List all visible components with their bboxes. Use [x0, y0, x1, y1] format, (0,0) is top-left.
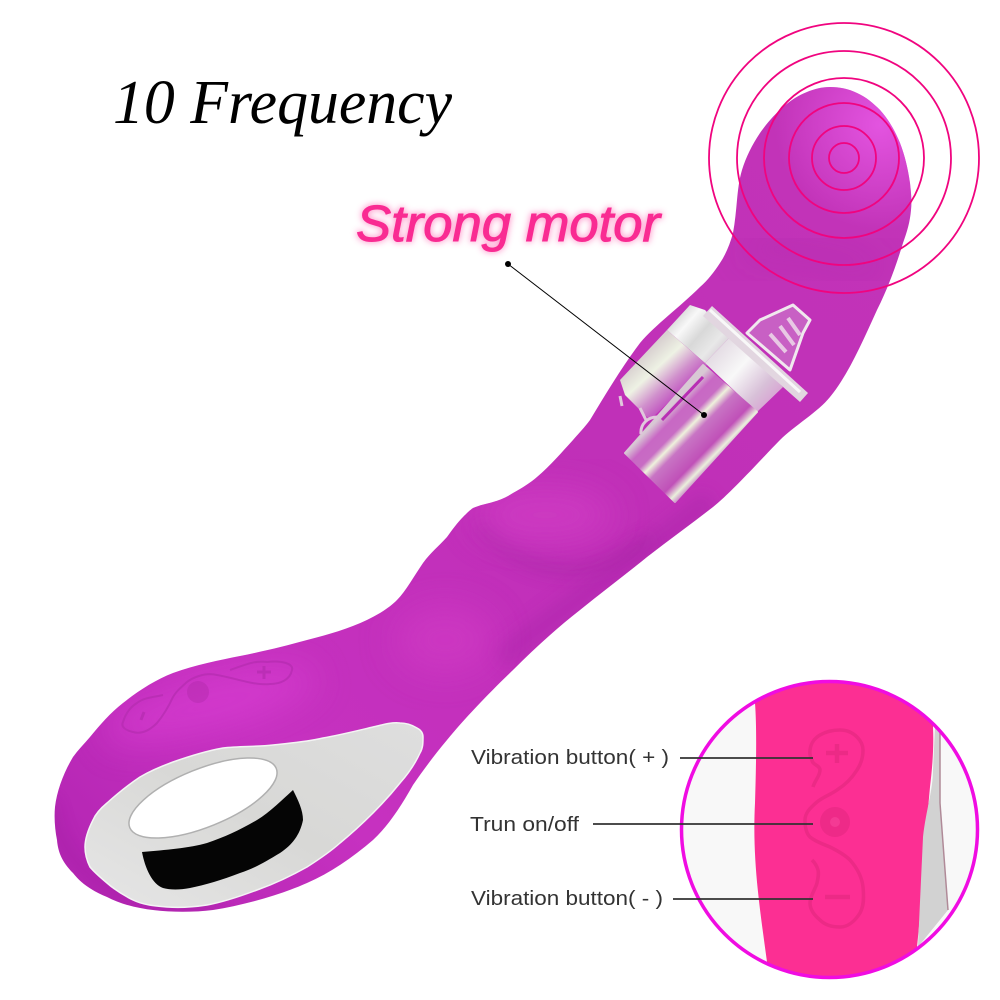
- pink handle: [754, 680, 935, 985]
- motor illustration: [620, 305, 810, 502]
- motor: middle section: [705, 337, 783, 412]
- callout: strong motor: [356, 195, 707, 418]
- motor: wiring: [620, 396, 657, 434]
- motor: lower cylinder: [625, 365, 757, 502]
- callout: strong motor: Strong motor: [356, 195, 662, 252]
- label: on off: Trun on/off: [470, 814, 579, 836]
- title: 10 Frequency: [113, 69, 452, 137]
- label: vibration plus: Vibration button( + ): [471, 747, 669, 769]
- motor: tip: [747, 305, 810, 370]
- button labels: [470, 747, 813, 910]
- motor: upper cylinder: [620, 330, 707, 420]
- handle opening: [119, 742, 287, 854]
- motor: flange: [703, 306, 808, 402]
- vibration rings: [709, 23, 979, 293]
- metal sliver: [918, 727, 948, 947]
- label: vibration minus: Vibration button( - ): [471, 888, 663, 910]
- embossed button outline: [805, 730, 864, 927]
- product body: [54, 87, 912, 912]
- black recess: [142, 790, 303, 890]
- embossed buttons on body: [122, 661, 292, 733]
- motor: end cap: [667, 305, 730, 363]
- callout: strong motor: Strong motor: [356, 195, 662, 252]
- button detail lens: [682, 680, 978, 985]
- metal handle plate: [85, 723, 423, 907]
